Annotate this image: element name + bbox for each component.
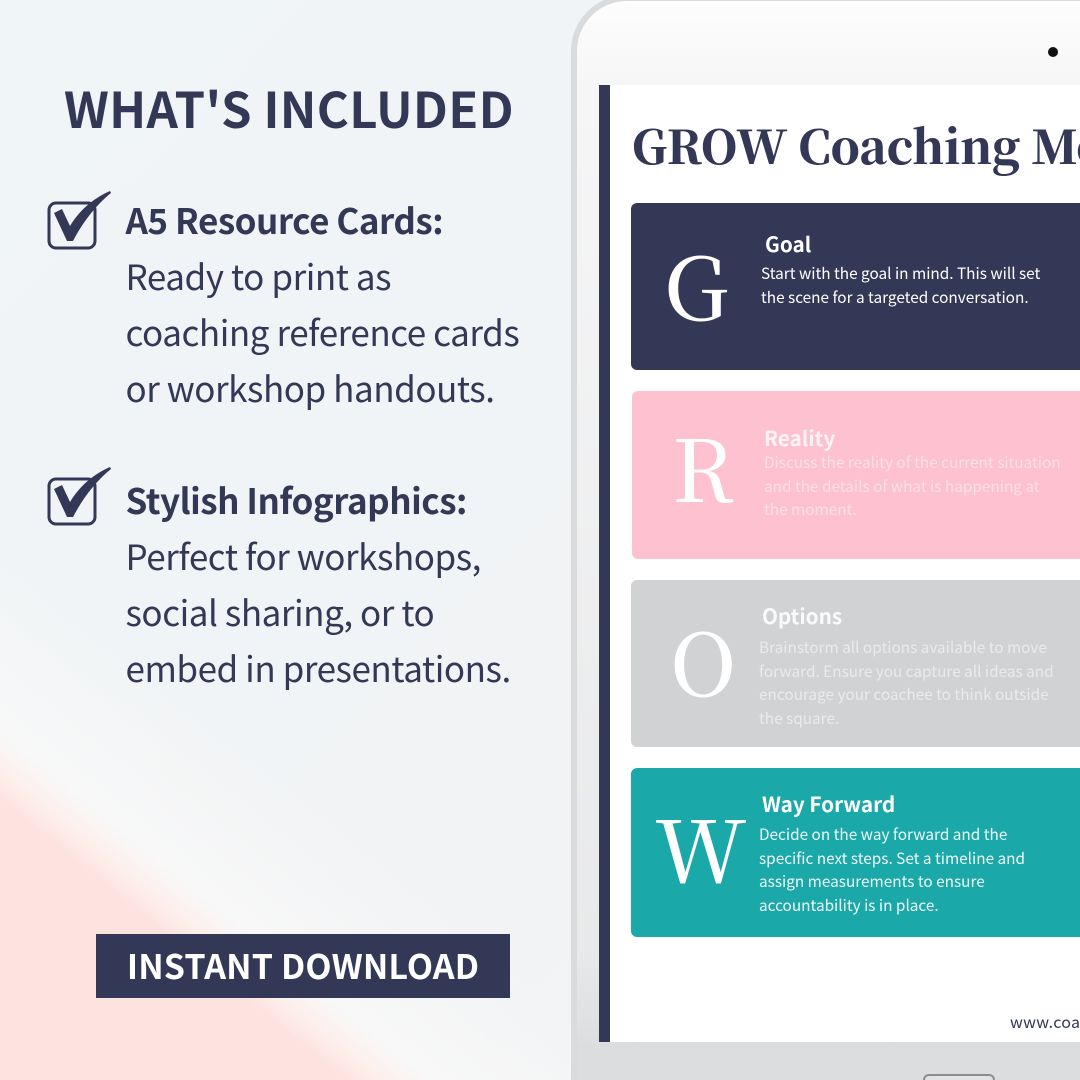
letter W: W — [655, 784, 747, 908]
tablet device — [571, 0, 1080, 1080]
options text: Brainstorm all options available to move — [759, 636, 1047, 658]
reality heading: Reality — [764, 422, 835, 452]
text block: stylish infographics — [126, 474, 511, 693]
text block: A5 resource cards: A5 Resource Cards: — [126, 194, 443, 245]
button: instant download: INSTANT DOWNLOAD — [127, 940, 479, 989]
icon: checkbox 2 — [48, 467, 111, 526]
screen: GROW document — [599, 85, 1080, 1042]
way forward heading: Way Forward — [762, 788, 895, 818]
options heading: Options — [762, 600, 842, 630]
reality text: the moment. — [764, 498, 857, 520]
text block: A5 resource cards: coaching reference cards — [126, 306, 519, 357]
goal text — [761, 262, 1040, 308]
reality text: and the details of what is happening at — [764, 475, 1040, 497]
reality text: Discuss the reality of the current situation — [764, 451, 1061, 473]
card: goal — [631, 203, 1080, 370]
card: way forward — [631, 768, 1080, 937]
goal text: Start with the goal in mind. This will set — [761, 262, 1040, 284]
text block: A5 resource cards: Ready to print as — [126, 250, 391, 301]
text block: A5 resource cards — [125, 194, 519, 413]
text block: stylish infographics: social sharing, or to — [126, 586, 434, 637]
text block: stylish infographics: Stylish Infographics: — [126, 474, 467, 525]
letter O: O — [670, 597, 736, 721]
goal text: the scene for a targeted conversation. — [761, 286, 1029, 308]
document side bar — [599, 85, 610, 1042]
way forward text: accountability is in place. — [759, 894, 939, 916]
options text: forward. Ensure you capture all ideas and — [759, 660, 1054, 682]
text block: stylish infographics: embed in presentations. — [126, 642, 511, 693]
camera dot — [1048, 47, 1058, 57]
way forward text: specific next steps. Set a timeline and — [759, 847, 1025, 869]
goal heading: Goal — [765, 228, 811, 258]
card: reality — [632, 391, 1080, 559]
way forward text — [759, 823, 1025, 916]
home button — [923, 1074, 995, 1080]
letter G: G — [664, 221, 728, 345]
button: instant download — [96, 934, 510, 998]
icon: checkbox 1 — [48, 191, 111, 250]
card: options — [631, 580, 1080, 747]
way forward text: assign measurements to ensure — [759, 870, 985, 892]
options text: the square. — [759, 707, 839, 729]
text block: stylish infographics: Perfect for workshops, — [126, 530, 481, 581]
text block: A5 resource cards: or workshop handouts. — [126, 362, 494, 413]
options text — [759, 636, 1054, 729]
letter R: R — [672, 403, 734, 527]
way forward text: Decide on the way forward and the — [759, 823, 1007, 845]
options text: encourage your coachee to think outside — [759, 683, 1049, 705]
reality text — [764, 451, 1061, 520]
heading: what's included: WHAT'S INCLUDED — [64, 72, 514, 143]
